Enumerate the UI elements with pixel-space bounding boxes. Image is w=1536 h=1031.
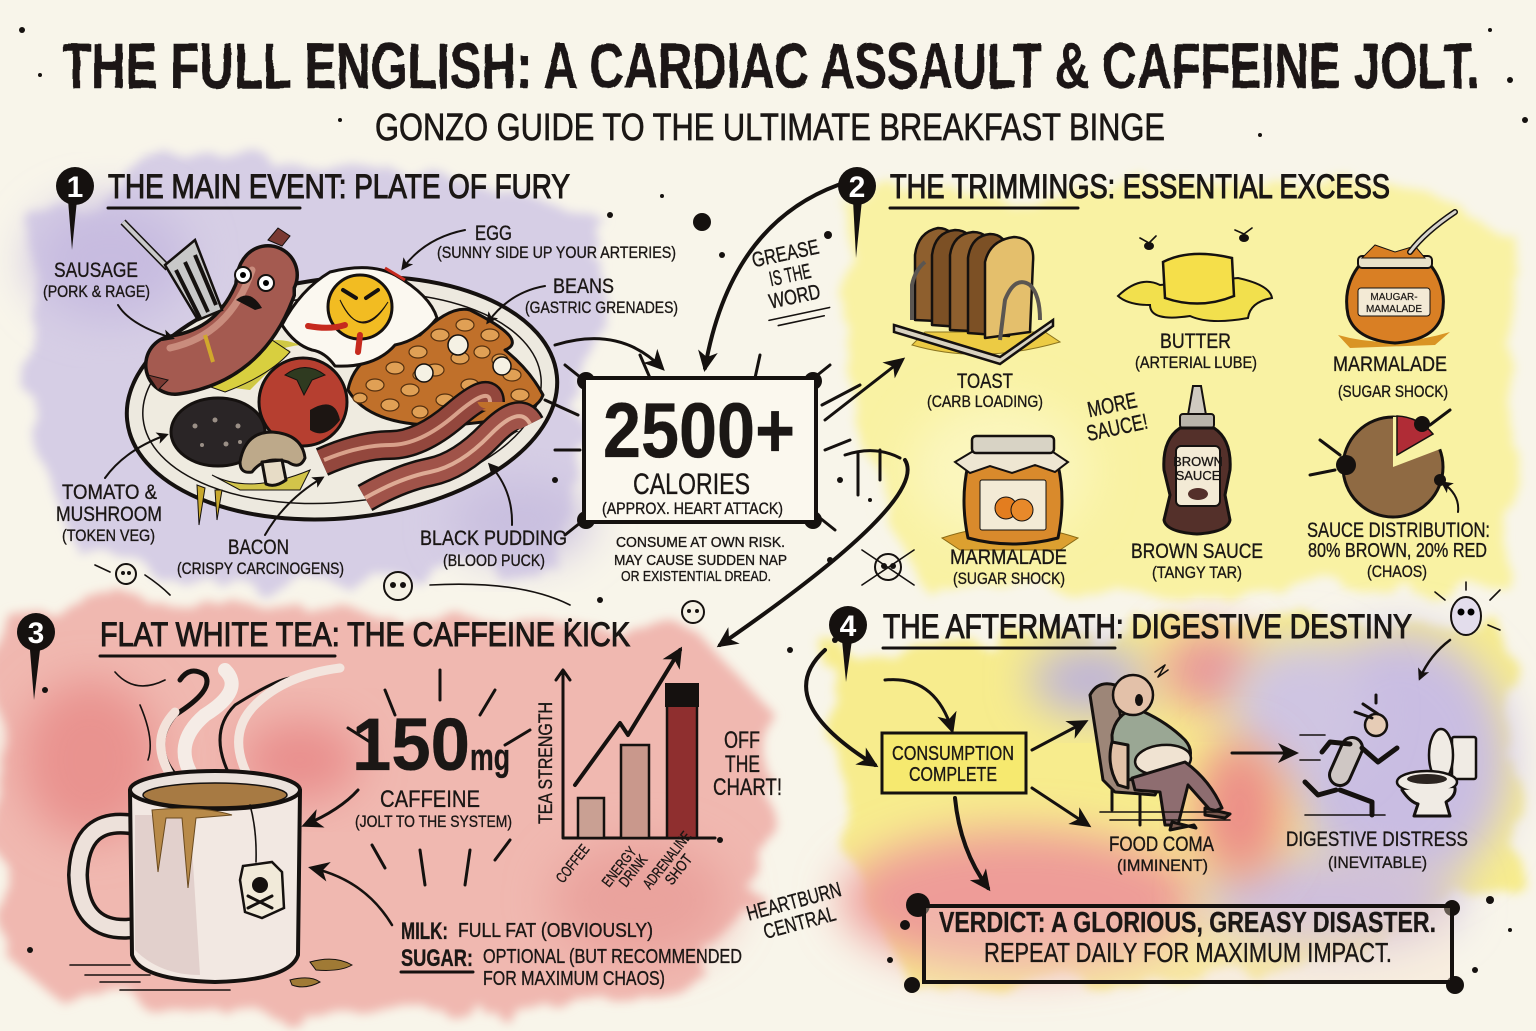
icon: marmalade jar top: MAMALADE — [1366, 304, 1422, 315]
label: marmalade bottom: (SUGAR SHOCK) — [953, 569, 1065, 588]
panel: flat white tea — [17, 613, 782, 990]
heading: main event: THE MAIN EVENT: PLATE OF FURY — [108, 168, 570, 206]
label: digestive distress — [1286, 828, 1468, 872]
icon: brown sauce bottle: BROWN — [1173, 454, 1223, 469]
label: sausage: SAUSAGE — [54, 259, 138, 282]
calorie callout: (APPROX. HEART ATTACK) — [602, 499, 783, 518]
beans — [348, 309, 543, 425]
label: sauce distribution: SAUCE DISTRIBUTION: — [1307, 519, 1490, 542]
text: milk and sugar: SUGAR: — [401, 945, 473, 972]
arrow: caffeine to mug — [305, 790, 358, 825]
callout: more sauce: MORE — [1085, 387, 1139, 422]
icon: screaming skull — [1420, 582, 1500, 678]
label: butter: BUTTER — [1160, 330, 1231, 353]
label: food coma — [1109, 833, 1214, 875]
callout: more sauce: SAUCE! — [1084, 409, 1150, 446]
arrow: heading to flow — [806, 650, 875, 765]
label: sausage — [43, 259, 172, 338]
panel: trimmings — [838, 167, 1490, 588]
label: tomato and mushroom: TOMATO & — [62, 481, 157, 504]
callout: grease is the word: WORD — [767, 280, 823, 314]
text: milk and sugar: FOR MAXIMUM CHAOS) — [483, 968, 665, 990]
label: marmalade top: (SUGAR SHOCK) — [1338, 382, 1448, 401]
callout: off the chart: THE — [725, 751, 760, 778]
callout: more sauce — [1079, 386, 1150, 446]
icon: steaming mug — [70, 668, 352, 990]
label: brown sauce — [1131, 540, 1263, 582]
sausage — [148, 228, 290, 390]
badge 1 — [56, 167, 94, 205]
box: consumption complete — [882, 733, 1026, 793]
warning text — [614, 534, 787, 585]
callout: grease is the word: IS THE — [767, 260, 813, 291]
skulls on beans — [415, 335, 511, 382]
label: tomato and mushroom: MUSHROOM — [56, 503, 162, 526]
label: toast — [927, 370, 1043, 411]
callout: heartburn central — [744, 878, 850, 947]
label: marmalade top: MARMALADE — [1333, 353, 1447, 376]
text: milk and sugar: OPTIONAL (BUT RECOMMENDED — [483, 946, 742, 968]
panel: main event — [43, 167, 678, 578]
label: bacon: (CRISPY CARCINOGENS) — [177, 559, 344, 578]
flies — [1140, 228, 1252, 250]
label: egg — [403, 222, 676, 268]
steam — [115, 668, 340, 785]
label: marmalade bottom — [950, 546, 1067, 588]
label: butter: (ARTERIAL LUBE) — [1135, 353, 1257, 372]
warning text: MAY CAUSE SUDDEN NAP — [614, 552, 787, 569]
callout: grease is the word — [750, 236, 833, 328]
heading: aftermath: THE AFTERMATH: DIGESTIVE DESTINY — [883, 608, 1412, 646]
label: marmalade top — [1333, 353, 1448, 401]
bar chart: tea strength — [536, 650, 715, 892]
handle — [78, 824, 135, 929]
icon: brown sauce bottle: SAUCE — [1176, 468, 1221, 483]
label: black pudding — [420, 465, 567, 570]
label: black pudding: BLACK PUDDING — [420, 527, 567, 550]
badge 2: 2 — [849, 171, 865, 204]
calorie callout: 2500+ — [603, 386, 795, 474]
label: toast: TOAST — [957, 370, 1013, 393]
arrow: coma to distress — [1232, 752, 1295, 754]
skull icons — [95, 550, 914, 623]
label: butter — [1135, 330, 1257, 372]
calorie callout — [545, 355, 860, 535]
badge 2 — [838, 167, 876, 205]
tomato — [259, 358, 347, 446]
box: verdict: REPEAT DAILY FOR MAXIMUM IMPACT. — [984, 937, 1392, 968]
label: brown sauce: (TANGY TAR) — [1152, 563, 1242, 582]
warning text: OR EXISTENTIAL DREAD. — [621, 568, 771, 585]
pie chart: sauce distribution — [1310, 410, 1450, 517]
ink drips — [845, 450, 900, 495]
arrow: calories to trimmings — [825, 360, 902, 420]
bar chart: tea strength: COFFEE — [553, 841, 593, 886]
callout: off the chart — [713, 727, 782, 801]
icon: food coma figure — [1090, 665, 1230, 830]
callout: grease is the word: GREASE — [750, 236, 821, 272]
icon: toilet — [1397, 729, 1476, 816]
arrow: plate to calories — [555, 339, 662, 368]
label: sauce distribution — [1307, 483, 1490, 581]
box: consumption complete: COMPLETE — [909, 764, 997, 786]
callout: 150mg caffeine: mg — [470, 737, 510, 779]
label: food coma: (IMMINENT) — [1117, 856, 1208, 875]
arrow: calories to tea — [720, 460, 908, 645]
egg — [282, 268, 437, 366]
label: beans: (GASTRIC GRENADES) — [525, 298, 678, 317]
label: beans — [488, 275, 678, 322]
label: sauce distribution: (CHAOS) — [1367, 562, 1427, 581]
warning text: CONSUME AT OWN RISK. — [616, 534, 785, 551]
bar chart: tea strength: TEA STRENGTH — [536, 702, 557, 824]
callout: off the chart: OFF — [724, 727, 760, 754]
label: marmalade bottom: MARMALADE — [950, 546, 1067, 569]
bar chart: tea strength: ENERGY — [599, 844, 640, 890]
heading: flat white tea: FLAT WHITE TEA: THE CAFFEINE KICK — [100, 616, 630, 654]
badge 3 — [17, 613, 55, 651]
fork — [123, 222, 222, 320]
label: tomato and mushroom: (TOKEN VEG) — [62, 526, 155, 545]
badge 1: 1 — [67, 171, 83, 204]
text: milk and sugar — [401, 918, 742, 990]
label: brown sauce: BROWN SAUCE — [1131, 540, 1263, 563]
label: toast: (CARB LOADING) — [927, 392, 1043, 411]
label: bacon: BACON — [228, 536, 289, 559]
plate illustration — [115, 222, 569, 540]
callout: 150mg caffeine: 150 — [352, 703, 470, 786]
bar chart: tea strength: DRINK — [616, 852, 651, 890]
mug body — [130, 790, 300, 982]
heading: trimmings: THE TRIMMINGS: ESSENTIAL EXCESS — [890, 168, 1390, 206]
callout: heartburn central: HEARTBURN — [744, 878, 844, 926]
bar chart: tea strength: ADRENALINE — [640, 828, 695, 892]
label: tomato and mushroom — [56, 435, 166, 545]
badge 4 — [829, 606, 867, 644]
panel: aftermath — [806, 582, 1500, 994]
label: sauce distribution: 80% BROWN, 20% RED — [1308, 540, 1487, 562]
label: digestive distress: (INEVITABLE) — [1328, 853, 1427, 872]
calorie callout: CALORIES — [633, 468, 750, 501]
callout: 150mg caffeine — [348, 670, 530, 885]
bar chart: tea strength: SHOT — [662, 851, 696, 888]
callout: heartburn central: CENTRAL — [761, 902, 838, 944]
icon: marmalade jar top — [1338, 212, 1455, 348]
label: food coma: FOOD COMA — [1109, 833, 1214, 856]
arrow: loop into consumption — [885, 680, 952, 730]
mushroom — [240, 432, 305, 485]
arrow: section 2 to calories — [705, 185, 838, 368]
icon: running man — [1300, 695, 1397, 815]
label: digestive distress: DIGESTIVE DISTRESS — [1286, 828, 1468, 851]
label: beans: BEANS — [553, 275, 614, 298]
box: verdict — [900, 893, 1478, 994]
label: black pudding: (BLOOD PUCK) — [443, 551, 545, 570]
badge 3: 3 — [28, 617, 44, 650]
icon: brown sauce bottle — [1164, 386, 1230, 534]
label: bacon — [177, 478, 344, 578]
badge 4: 4 — [840, 610, 857, 643]
label: sausage: (PORK & RAGE) — [43, 282, 150, 301]
arrow: milk to mug — [312, 868, 392, 925]
black pudding — [171, 398, 265, 466]
icon: toast rack — [894, 228, 1060, 364]
text: milk and sugar: MILK: — [401, 918, 448, 945]
callout: 150mg caffeine: (JOLT TO THE SYSTEM) — [355, 812, 512, 831]
label: egg: (SUNNY SIDE UP YOUR ARTERIES) — [437, 243, 676, 262]
box: consumption complete: CONSUMPTION — [892, 743, 1014, 765]
icon: marmalade jar bottom — [942, 436, 1078, 550]
callout: 150mg caffeine: CAFFEINE — [380, 786, 480, 813]
label: egg: EGG — [475, 222, 512, 245]
bacon — [322, 396, 530, 498]
icon: butter — [1118, 228, 1272, 321]
text: milk and sugar: FULL FAT (OBVIOUSLY) — [458, 920, 653, 942]
callout: off the chart: CHART! — [713, 774, 782, 801]
icon: marmalade jar top: MAUGAR- — [1370, 292, 1418, 303]
arrows: from consumption — [955, 722, 1088, 888]
subtitle: GONZO GUIDE TO THE ULTIMATE BREAKFAST BINGE — [375, 107, 1165, 149]
